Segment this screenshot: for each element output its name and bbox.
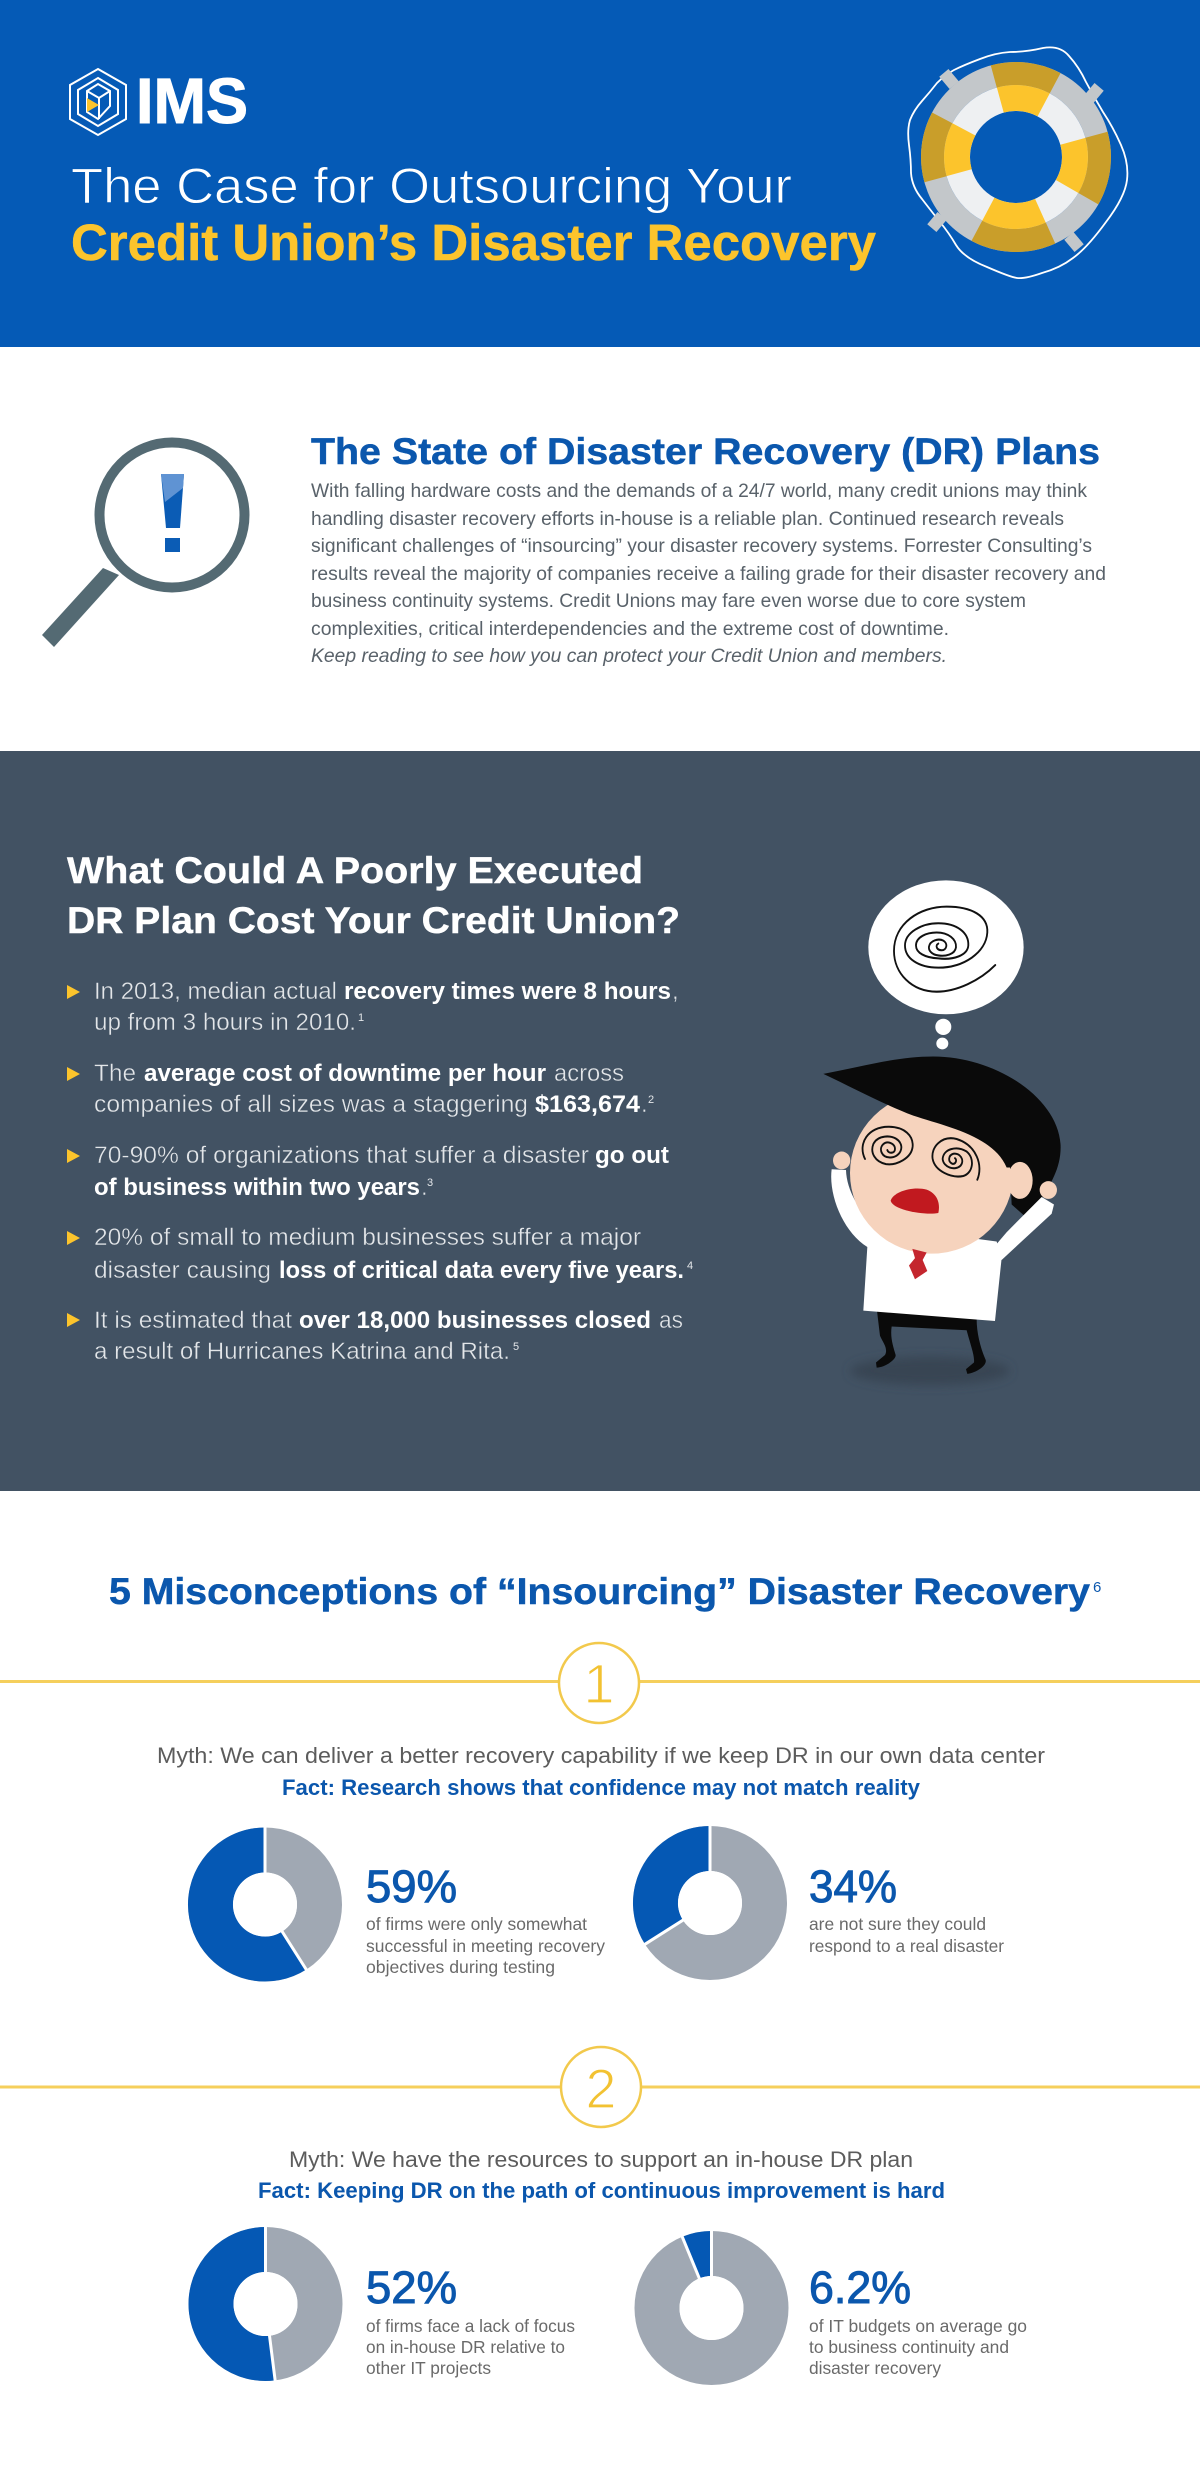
stat 59%: of firms were only somewhat [366,1914,587,1934]
hair [823,1056,1061,1219]
text block: intro: results reveal the majority of companies receive a failing grade for their disaster recovery and [311,563,1106,585]
thought bubble [868,880,1024,1049]
stat 59%: objectives during testing [366,1957,555,1977]
bullet 4: 20% of small to medium businesses suffer a major [94,1224,641,1251]
icon: IMS hexagon logo [70,69,126,135]
stat 34%: respond to a real disaster [809,1936,1004,1956]
bullet 2: average cost of downtime per hour [144,1060,546,1087]
ear [1007,1162,1033,1199]
donut 6.2% [640,2229,783,2379]
bullet 2: companies of all sizes was a staggering [94,1091,528,1118]
text block: intro: handling disaster recovery efforts in-house is a reliable plan. Continued research reveals [311,508,1064,530]
bullet 1: , [672,978,679,1005]
bullet 3: 3 [427,1177,433,1189]
fact text: Fact: Keeping DR on the path of continuous improvement is hard [258,2178,945,2203]
donut 59% [190,1825,340,1980]
stat 34%: 34% [809,1861,897,1912]
bullet 4: disaster causing [94,1257,271,1284]
number badge 2 [561,2047,641,2127]
stat 6.2%: 6.2% [809,2262,911,2313]
bullet 3: of business within two years [94,1174,420,1201]
myth text: Myth: We can deliver a better recovery capability if we keep DR in our own data center [157,1743,1045,1768]
tie [909,1249,927,1279]
bullet 2: across [554,1060,624,1087]
bullet 3: go out [595,1142,669,1169]
text block: intro [311,480,1106,667]
stat 52%: of firms face a lack of focus [366,2316,575,2336]
heading: misconceptions: 6 [1093,1579,1101,1596]
right arm [997,1197,1054,1260]
bullet 2: . [641,1091,648,1118]
hands [833,1152,850,1169]
panel: myth 2 [0,2047,1200,2382]
fact text: Fact: Research shows that confidence may not match reality [282,1775,921,1800]
stat 52%: other IT projects [366,2358,491,2378]
number badge 2: 2 [585,2057,617,2120]
stat 52%: on in-house DR relative to [366,2337,565,2357]
bullet 2: $163,674 [535,1091,641,1118]
number badge 1: 1 [583,1652,615,1715]
bullet 5: as [659,1307,683,1334]
bullet 4 [67,1224,693,1284]
bullet 5: a result of Hurricanes Katrina and Rita. [94,1338,510,1365]
stat 59%: successful in meeting recovery [366,1936,605,1956]
number badge 1 [559,1643,639,1723]
stat 59%: 59% [366,1861,457,1912]
bullet 4: 4 [687,1260,693,1272]
title line 2: Credit Union’s Disaster Recovery [71,214,877,271]
heading: cost question: DR Plan Cost Your Credit Union? [67,900,680,941]
text block: intro: significant challenges of “insourcing” your disaster recovery systems. Forrester Consulting’s [311,535,1092,557]
text block: intro: complexities, critical interdependencies and the extreme cost of downtime. [311,618,949,640]
panel: state of DR plans [42,431,1106,667]
panel: header [0,0,1200,347]
bullet 5: over 18,000 businesses closed [299,1307,651,1334]
legs [876,1308,986,1374]
bullet 3: . [421,1174,428,1201]
bullet 3 [67,1142,669,1201]
bullet 5 [67,1307,683,1365]
bullet 1: up from 3 hours in 2010. [94,1009,356,1036]
dizzy eyes [863,1127,979,1180]
heading: misconceptions: 5 Misconceptions of “Insourcing” Disaster Recovery [109,1571,1090,1612]
bullet 1: recovery times were 8 hours [344,978,671,1005]
stat 34% [809,1861,1004,1956]
heading: cost question: What Could A Poorly Executed [67,850,643,891]
text block: intro: With falling hardware costs and the demands of a 24/7 world, many credit unions may think [311,480,1087,502]
bullet 2: 2 [648,1094,654,1106]
panel: cost of poor DR plan [0,751,1200,1491]
bullet 1: In 2013, median actual [94,978,337,1005]
title line 1: The Case for Outsourcing Your [71,158,792,214]
icon: magnifying glass [42,442,244,647]
bullet 1: 1 [358,1012,364,1024]
bullet 2: The [94,1060,136,1087]
stat 6.2%: of IT budgets on average go [809,2316,1027,2336]
logo wordmark: IMS [136,65,248,137]
stat 6.2% [809,2262,1027,2378]
stat 59% [366,1861,605,1977]
mouth [891,1188,939,1214]
shirt and left arm [831,1169,1002,1321]
bullet 5: It is estimated that [94,1307,292,1334]
donut 52% [205,2225,326,2382]
stat 52% [366,2262,575,2378]
stat 6.2%: to business continuity and [809,2337,1009,2357]
illustration: dizzy man with thought bubble [823,880,1061,1385]
text block: intro: Keep reading to see how you can protect your Credit Union and members. [311,645,947,667]
bullet 5: 5 [513,1341,519,1353]
donut 34% [635,1824,785,1978]
text block: intro: business continuity systems. Credit Unions may fare even worse due to core system [311,590,1026,612]
panel: myth 1 [0,1643,1200,1980]
stat 34%: are not sure they could [809,1914,986,1934]
stat 52%: 52% [366,2262,457,2313]
bullet 3: 70-90% of organizations that suffer a disaster [94,1142,589,1169]
icon: life ring [906,47,1127,278]
head [850,1092,1013,1254]
stat 6.2%: disaster recovery [809,2358,941,2378]
bullet 4: loss of critical data every five years. [279,1257,684,1284]
heading: state of DR: The State of Disaster Recovery (DR) Plans [311,431,1100,472]
bullet 2 [67,1060,654,1118]
myth text: Myth: We have the resources to support an in-house DR plan [289,2147,913,2172]
heading: cost question [67,850,680,941]
bullet 1 [67,978,679,1036]
